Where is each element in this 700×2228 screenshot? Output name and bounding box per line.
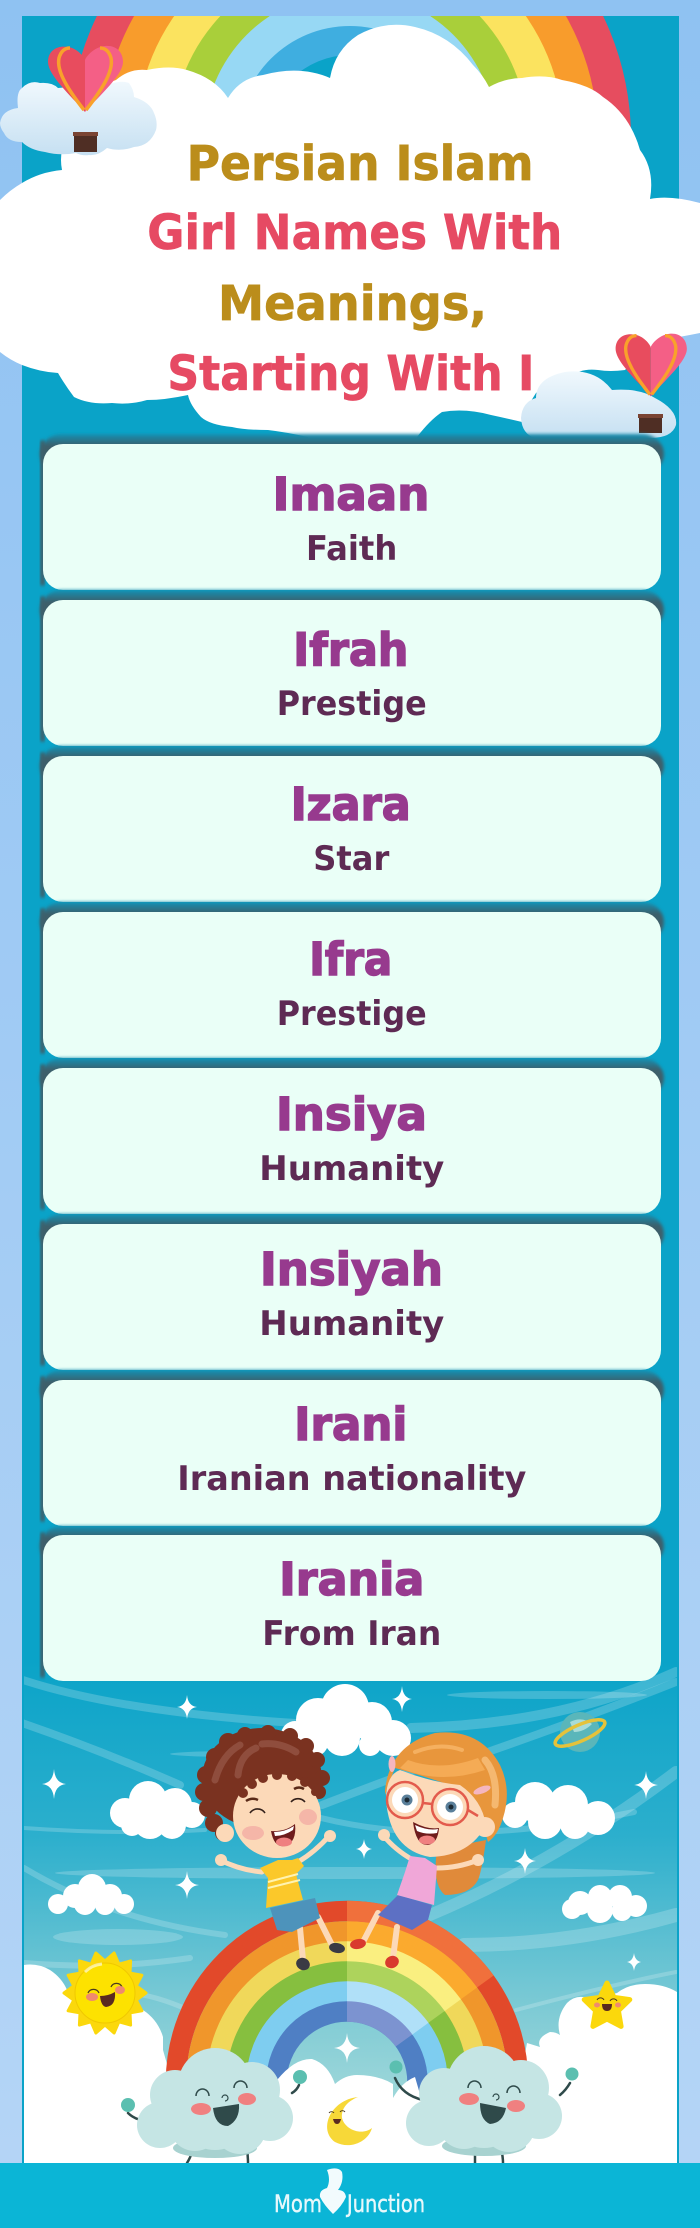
card: Izara: Izara xyxy=(291,778,411,831)
sky streaks xyxy=(22,1672,676,2020)
boy curly hair xyxy=(195,1725,330,1841)
icon: smiling sun xyxy=(64,1953,146,2033)
card: Insiya xyxy=(40,1058,664,1214)
rainbow highlight wedge xyxy=(347,1911,485,2040)
left balloon cloud xyxy=(0,82,157,155)
card: Irani: Iranian nationality xyxy=(177,1459,526,1499)
left cloud hands xyxy=(121,2098,135,2112)
girl ponytail xyxy=(436,1840,486,1895)
card: Insiya: Insiya xyxy=(276,1088,427,1141)
card: Irania: Irania xyxy=(279,1553,424,1606)
girl hair xyxy=(385,1732,507,1842)
boy shorts xyxy=(270,1898,320,1932)
left balloon basket xyxy=(73,132,98,152)
icon: ringed planet xyxy=(552,1712,608,1752)
left cloud limbs xyxy=(128,2085,299,2163)
card: Ifra xyxy=(40,902,664,1058)
girl legs and shoes xyxy=(349,1913,401,1970)
title xyxy=(147,136,562,402)
MomJunction logo: Mom xyxy=(274,2190,322,2218)
sky background xyxy=(24,1660,677,2163)
small white clouds xyxy=(48,1684,647,1923)
card: Ifrah: Ifrah xyxy=(293,624,408,676)
girl face xyxy=(386,1756,495,1857)
boy character xyxy=(195,1725,346,1972)
icon: smiling star xyxy=(584,1983,630,2026)
header rainbow xyxy=(82,16,631,128)
boy face xyxy=(216,1770,321,1858)
title: Girl Names With xyxy=(147,205,562,261)
girl character xyxy=(349,1732,507,1970)
right cloud hands xyxy=(390,2060,402,2074)
left cloud face xyxy=(191,2081,256,2126)
MomJunction logo: Junction xyxy=(345,2190,425,2218)
rainbow base bands xyxy=(176,1911,518,2095)
girl shirt xyxy=(397,1856,437,1905)
card: Ifrah: Prestige xyxy=(277,684,427,724)
card: Ifra: Ifra xyxy=(309,933,392,986)
footer band xyxy=(0,2163,700,2228)
boy shirt xyxy=(260,1858,304,1908)
card: Imaan: Faith xyxy=(306,529,397,569)
card: Irania: From Iran xyxy=(262,1614,441,1654)
right balloon basket xyxy=(638,414,663,433)
card: Ifra: Prestige xyxy=(277,994,427,1034)
card: Insiyah: Insiyah xyxy=(260,1243,443,1296)
card: Irania xyxy=(40,1526,664,1681)
MomJunction logo xyxy=(274,2168,425,2218)
right hot air balloon with cloud xyxy=(521,334,687,438)
left smiling cloud character xyxy=(121,2048,307,2163)
girl skirt xyxy=(378,1895,432,1930)
right cloud body xyxy=(406,2046,562,2156)
logo icon xyxy=(320,2168,346,2214)
title: Persian Islam xyxy=(187,136,534,192)
boy legs and shoes xyxy=(294,1917,346,1972)
card: Izara xyxy=(40,746,664,902)
right cloud limbs xyxy=(395,2078,570,2163)
right cloud face xyxy=(459,2081,525,2124)
sparkle under rainbow xyxy=(334,2033,360,2063)
left cloud body xyxy=(137,2048,293,2158)
card: Imaan: Imaan xyxy=(273,468,429,521)
card: Insiya: Humanity xyxy=(259,1149,444,1189)
girl arms xyxy=(383,1835,478,1868)
card: Izara: Star xyxy=(313,839,390,879)
left balloon heart xyxy=(48,46,123,112)
card: Imaan xyxy=(40,434,664,590)
title: Meanings, xyxy=(218,276,487,332)
big rainbow xyxy=(176,1911,518,2095)
right smiling cloud character xyxy=(390,2046,578,2163)
icon: crescent moon xyxy=(327,2097,372,2145)
card: Ifrah xyxy=(40,590,664,746)
card: Irani xyxy=(40,1370,664,1526)
title: Starting With I xyxy=(167,346,534,402)
boy arms xyxy=(220,1835,330,1872)
left hot air balloon with cloud xyxy=(0,46,157,155)
right balloon heart xyxy=(616,334,687,396)
white cloud hills xyxy=(24,1965,677,2163)
sparkle stars xyxy=(42,1686,658,1971)
illustration: sky scene xyxy=(22,1660,677,2163)
card: Irani: Irani xyxy=(294,1398,407,1451)
header white cloud xyxy=(0,25,700,444)
center white cloud hump xyxy=(260,2059,440,2163)
card: Insiyah: Humanity xyxy=(259,1304,444,1344)
card: Insiyah xyxy=(40,1214,664,1370)
right balloon cloud xyxy=(521,371,676,438)
